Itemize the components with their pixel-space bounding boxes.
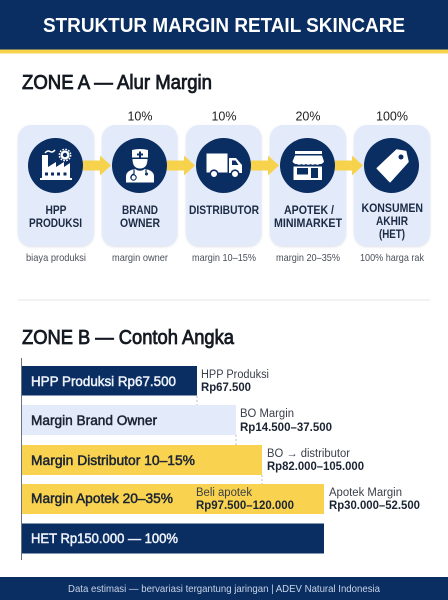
card labels: (HET) (379, 229, 405, 241)
bar: brand owner (22, 405, 236, 435)
value callouts: HPP Produksi (201, 369, 269, 381)
bar: HET: HET Rp150.000 — 100% (31, 531, 178, 546)
card captions (26, 252, 425, 264)
value callouts: Rp82.000–105.000 (267, 461, 364, 473)
percent labels: 100% (376, 110, 408, 124)
card captions: margin 20–35% (276, 252, 340, 264)
card captions: margin owner (112, 252, 168, 264)
bar: apotek (22, 484, 324, 514)
value callouts: Beli apotek (196, 487, 252, 499)
card captions: margin 10–15% (192, 252, 256, 264)
card labels: DISTRIBUTOR (189, 205, 260, 217)
bar: distributor (22, 445, 262, 475)
footer: Data estimasi — bervariasi tergantung jaringan | ADEV Natural Indonesia (68, 583, 380, 595)
bar: HET (22, 524, 324, 554)
value callouts: Rp67.500 (201, 382, 251, 394)
bar: apotek: Margin Apotek 20–35% (31, 491, 173, 506)
card labels: HPP (46, 205, 67, 217)
card labels: MINIMARKET (274, 218, 342, 230)
value callouts: BO Margin (240, 408, 294, 420)
value callouts (196, 369, 420, 512)
card labels: OWNER (120, 218, 161, 230)
percent labels: 10% (211, 110, 237, 124)
percent labels (127, 110, 408, 124)
card captions: biaya produksi (26, 252, 86, 264)
icon: price tag (364, 138, 419, 193)
percent labels: 20% (295, 110, 321, 124)
icon: truck (196, 138, 251, 193)
bar: distributor: Margin Distributor 10–15% (31, 453, 195, 468)
heading: zone A: ZONE A — Alur Margin (22, 72, 212, 94)
header banner (0, 0, 448, 54)
chart: margin stack (21, 358, 324, 560)
bar: HPP: HPP Produksi Rp67.500 (31, 374, 176, 389)
icon: factory (28, 138, 83, 193)
card labels (29, 203, 423, 241)
value callouts: Rp14.500–37.500 (240, 422, 332, 434)
card captions: 100% harga rak (360, 252, 425, 264)
value callouts: Apotek Margin (329, 487, 402, 499)
card labels: APOTEK / (284, 205, 335, 217)
heading: zone B: ZONE B — Contoh Angka (22, 327, 235, 349)
title: STRUKTUR MARGIN RETAIL SKINCARE (43, 15, 405, 37)
percent labels: 10% (127, 110, 153, 124)
cards row (18, 125, 430, 246)
icon: storefront (280, 138, 335, 193)
value callouts: BO → distributor (267, 448, 350, 460)
card labels: KONSUMEN (362, 203, 423, 215)
card labels: BRAND (122, 205, 158, 217)
card labels: PRODUKSI (29, 218, 82, 230)
card labels: AKHIR (376, 216, 409, 228)
icon: doctor (112, 138, 167, 193)
bar: HPP (22, 366, 197, 396)
arrows (83, 156, 363, 176)
value callouts: Rp30.000–52.500 (329, 500, 420, 512)
bar: brand owner: Margin Brand Owner (31, 413, 157, 428)
value callouts: Rp97.500–120.000 (196, 500, 294, 512)
footer (0, 577, 448, 600)
